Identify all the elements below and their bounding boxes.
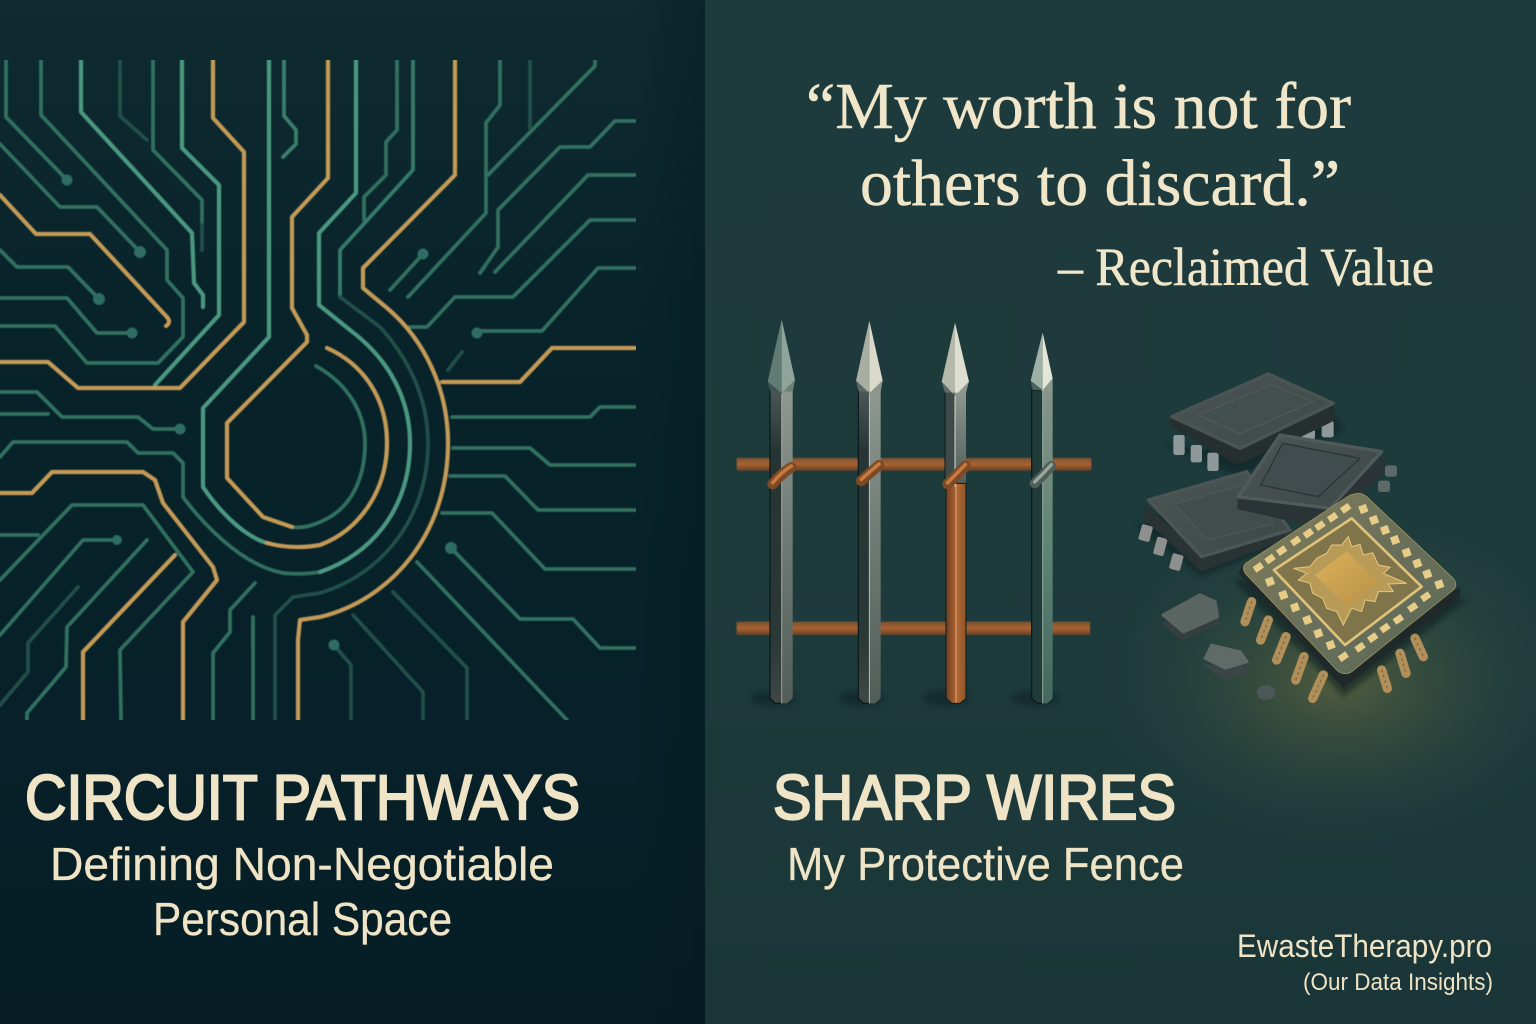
post shadows [750,690,1058,706]
source credit: (Our Data Insights) [1303,969,1493,996]
illustration: discarded microchips [1137,374,1467,700]
chip shadows [1137,417,1467,697]
copper rails [737,458,1091,635]
source credit [1237,928,1493,996]
subtitle: my protective fence: My Protective Fence [787,838,1184,890]
trace terminal dots [62,174,482,650]
gold chip legs [1245,602,1423,698]
grey chip, middle [1238,435,1397,523]
quote: others to discard.” [860,147,1340,220]
illustration: protective fence [737,319,1091,706]
bright green traces [81,60,413,572]
subtitle: defining non-negotiable personal space: Personal Space [153,893,452,945]
grey chip, left [1138,472,1290,571]
subtitle: defining non-negotiable personal space [50,838,554,945]
quote [806,70,1351,220]
circuit trace diagram [0,60,635,720]
teal traces, mid tone [0,60,635,720]
panel: sharp wires background [705,0,1536,1024]
quote attribution: – Reclaimed Value [1057,237,1434,297]
gold microchip [1238,493,1460,688]
quote: “My worth is not for [806,70,1351,143]
heading: sharp wires: SHARP WIRES [773,763,1176,833]
copper wire wraps [773,464,1051,484]
fence post 4 [1031,333,1053,703]
grey chip, top [1171,374,1334,471]
source credit: EwasteTherapy.pro [1237,928,1492,964]
fence post 3, copper [942,323,969,703]
gold traces [0,60,635,720]
heading: circuit pathways: CIRCUIT PATHWAYS [25,763,580,833]
subtitle: defining non-negotiable personal space: Defining Non-Negotiable [50,838,554,890]
panel: circuit pathways background [0,0,705,1024]
chip fragments [1163,595,1275,700]
dim traces [0,60,530,720]
fence post 1 [768,319,795,703]
fence post 2 [856,321,883,703]
